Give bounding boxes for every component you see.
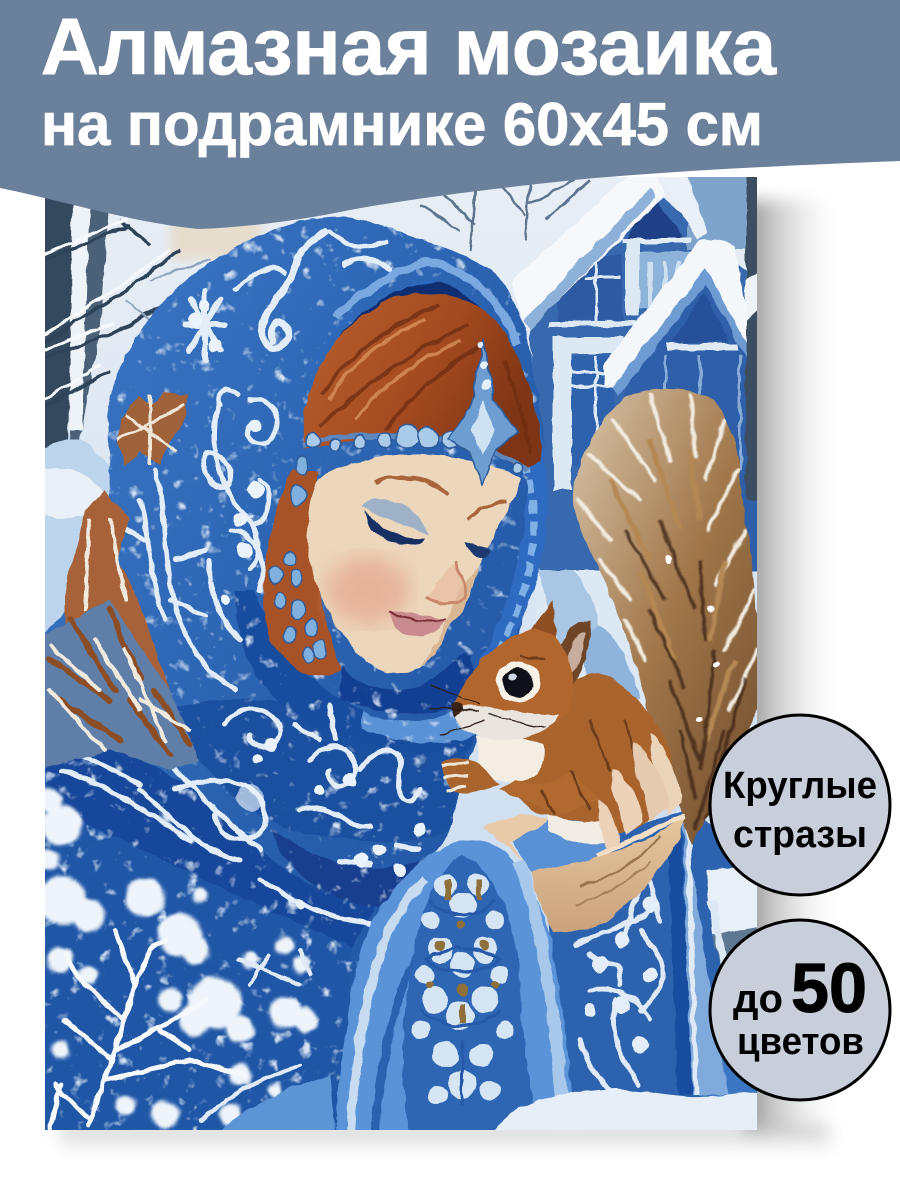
badge: up to 50 colours: цветов	[737, 1021, 864, 1063]
scarf ornaments	[60, 232, 420, 925]
gable and second roof	[624, 286, 757, 572]
header banner	[0, 0, 900, 229]
eyelid	[362, 499, 428, 535]
lace on robe	[575, 880, 663, 1090]
squirrel	[430, 600, 673, 835]
left sleeve with lace panel	[335, 840, 575, 1140]
badge: round rhinestones	[710, 715, 890, 895]
painting: girl with squirrel	[35, 167, 767, 1140]
hand	[483, 733, 685, 932]
squirrel tail	[573, 388, 767, 846]
lips	[388, 612, 446, 636]
bare trees behind hood	[420, 180, 590, 250]
closed eye right	[465, 542, 490, 557]
title: Алмазная мозаика	[41, 2, 776, 91]
frost flecks	[35, 217, 545, 1140]
badge: up to 50 colours	[710, 920, 890, 1100]
tiara	[268, 340, 528, 662]
nose	[427, 560, 465, 604]
tail fur streaks	[578, 395, 757, 710]
badge: up to 50 colours: 50	[791, 949, 867, 1027]
badge: round rhinestones: Круглые	[723, 765, 877, 807]
eyebrows	[375, 477, 448, 494]
hair	[264, 293, 542, 676]
badge: up to 50 colours: до	[733, 977, 783, 1021]
lower scarf swirls	[225, 709, 280, 748]
lower scarf dark folds	[35, 740, 380, 948]
snow-covered tree lower left	[38, 788, 335, 1140]
blue cuff	[505, 819, 620, 872]
big curl and vine on hood	[262, 232, 325, 347]
hood inner rim	[312, 280, 548, 680]
brown leaf ornaments	[35, 392, 200, 770]
main roof snow	[510, 170, 665, 330]
house	[510, 170, 767, 570]
badge: round rhinestones: стразы	[733, 814, 867, 856]
floral lace panel	[214, 405, 259, 570]
right sleeve and robe	[548, 812, 757, 1098]
foreground snow	[495, 1088, 757, 1130]
lace panel	[402, 855, 540, 1140]
subtitle: на подрамнике 60х45 см	[41, 91, 763, 158]
winter background	[45, 177, 757, 934]
scarf and body	[35, 217, 548, 1140]
bare trees left	[35, 190, 210, 450]
chin shadow and collar	[234, 590, 475, 750]
face	[307, 454, 520, 674]
closed eye left	[364, 510, 424, 545]
canvas shadow	[60, 200, 830, 1153]
